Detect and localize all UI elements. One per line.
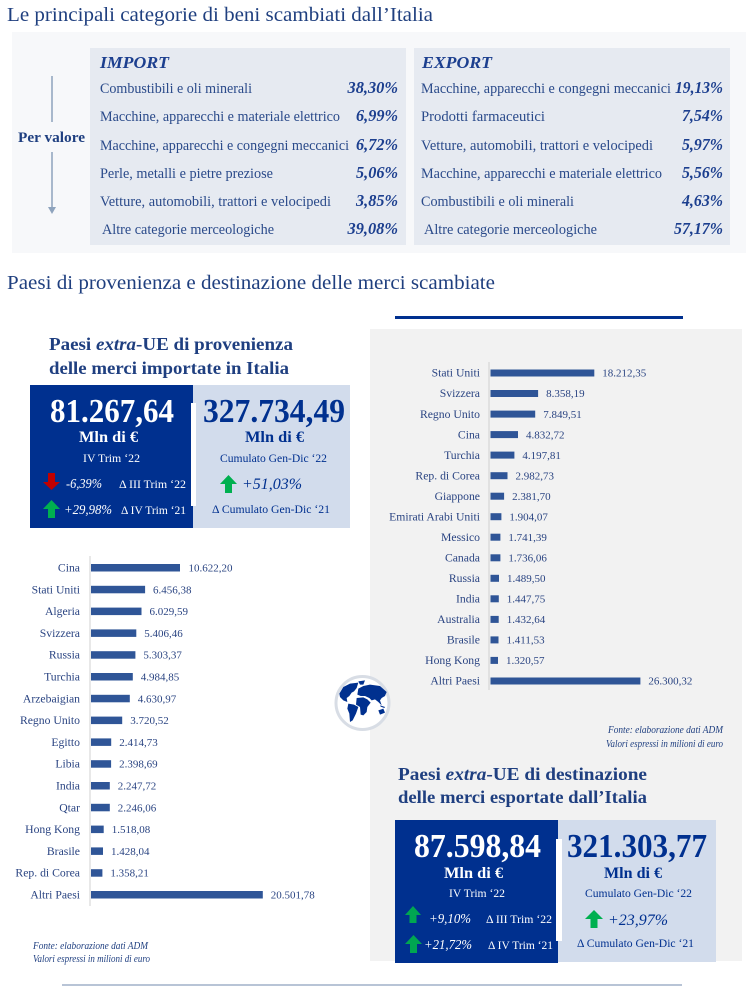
bar chart: import countries: Algeria xyxy=(45,605,81,618)
bar chart: export countries: Emirati Arabi Uniti xyxy=(389,510,481,523)
bar chart: import countries: 2.414,73 xyxy=(119,737,158,749)
panel: import: 3,85% xyxy=(355,191,398,210)
panel: export: Prodotti farmaceutici xyxy=(421,109,545,125)
panel: categorie xyxy=(12,32,746,253)
panel: export: 5,97% xyxy=(682,135,723,154)
kpi card: import: +51,03% xyxy=(242,476,302,493)
bar chart: export countries: 18.212,35 xyxy=(602,368,647,380)
bar chart: import countries: Regno Unito xyxy=(20,714,80,727)
kpi card: export: +9,10% xyxy=(429,911,471,926)
panel: export: 5,56% xyxy=(682,163,723,182)
kpi card: import: 81.267,64 xyxy=(50,393,174,430)
bar chart: import countries: Cina xyxy=(58,562,81,574)
per valore arrow: Per valore xyxy=(18,130,85,146)
bar chart: export countries: Australia xyxy=(437,613,481,626)
bar chart: import countries: Hong Kong xyxy=(25,823,80,836)
bar chart: export countries: Altri Paesi xyxy=(430,675,481,688)
source note: export: Valori espressi in milioni di euro xyxy=(606,739,723,750)
bar chart: export countries: India xyxy=(456,592,481,606)
per valore arrow xyxy=(18,76,85,214)
bar chart: import countries: 4.630,97 xyxy=(138,693,177,705)
bar chart: import countries: 3.720,52 xyxy=(130,715,169,727)
bar chart: export countries: Canada xyxy=(445,552,481,564)
bar chart: export countries: Rep. di Corea xyxy=(415,469,481,482)
bar chart: export countries: 1.904,07 xyxy=(509,511,548,523)
bar chart: import countries: 6.456,38 xyxy=(153,584,192,596)
kpi card: import xyxy=(30,385,350,528)
bar chart: import countries: 2.247,72 xyxy=(118,780,156,792)
panel: export: 7,54% xyxy=(682,106,723,125)
source note: import xyxy=(32,941,150,965)
bar chart: export countries: 1.736,06 xyxy=(508,552,547,564)
bar chart: import countries: Turchia xyxy=(44,670,81,684)
bar chart: import countries: Rep. di Corea xyxy=(15,867,81,880)
icon: green up arrow cumulative xyxy=(585,910,603,928)
source note: import: Valori espressi in milioni di euro xyxy=(33,954,150,965)
panel: import: Combustibili e oli minerali xyxy=(100,81,252,97)
bar chart: import countries: 1.518,08 xyxy=(112,824,151,836)
panel: import: 6,99% xyxy=(356,106,398,125)
panel: import: 39,08% xyxy=(347,219,398,238)
kpi card: import: Δ Cumulato Gen-Dic ‘21 xyxy=(212,504,330,516)
bar chart: import countries: 5.406,46 xyxy=(144,628,183,640)
bar chart: import countries: Libia xyxy=(55,758,81,771)
icon: green up arrow 2 xyxy=(405,935,422,953)
bar chart: import countries: Svizzera xyxy=(40,627,81,640)
panel: export: 57,17% xyxy=(674,219,723,238)
heading: import countries: delle merci importate in Italia xyxy=(49,358,289,378)
bar chart: import countries: Qtar xyxy=(59,801,80,814)
bar chart: export countries: 1.489,50 xyxy=(507,573,546,585)
panel: import: Perle, metalli e pietre preziose xyxy=(100,166,273,182)
panel: export xyxy=(414,48,730,245)
bar chart: export countries: Hong Kong xyxy=(425,654,480,667)
bar chart: import countries: Brasile xyxy=(47,845,80,858)
panel: import: Macchine, apparecchi e materiale elettrico xyxy=(100,109,340,125)
bar chart: import countries: 5.303,37 xyxy=(143,650,182,662)
panel: export: Altre categorie merceologiche xyxy=(424,222,597,238)
bar chart: import countries: 6.029,59 xyxy=(150,606,188,618)
bar chart: import countries: 20.501,78 xyxy=(271,890,315,902)
bar chart: export countries: 1.432,64 xyxy=(507,614,546,626)
title: paesi: Paesi di provenienza e destinazione delle merci scambiate xyxy=(7,272,495,294)
icon: green up arrow cumulative xyxy=(220,475,237,493)
heading: import countries: Paesi extra-UE di provenienza xyxy=(49,334,293,354)
bar chart: import countries: 4.984,85 xyxy=(141,672,180,684)
kpi card: export: Δ IV Trim ‘21 xyxy=(488,940,553,952)
bar chart: export countries: Brasile xyxy=(447,634,480,647)
panel: import: Vetture, automobili, trattori e velocipedi xyxy=(100,194,331,210)
bar chart: export countries: 1.320,57 xyxy=(506,655,545,667)
bar chart: export countries: 1.741,39 xyxy=(508,532,547,544)
kpi card: export: Δ Cumulato Gen-Dic ‘21 xyxy=(577,938,694,950)
panel: import: 6,72% xyxy=(356,135,398,154)
kpi card: import: -6,39% xyxy=(66,476,102,491)
kpi card: import: Cumulato Gen-Dic ‘22 xyxy=(220,453,327,465)
bar chart: import countries: 1.358,21 xyxy=(110,868,149,880)
icon: red down arrow xyxy=(43,473,60,490)
panel: import: 38,30% xyxy=(347,78,398,97)
bar chart: import countries: 1.428,04 xyxy=(111,846,150,858)
bar chart: export countries: 2.381,70 xyxy=(512,491,551,503)
bar chart: export countries: 1.447,75 xyxy=(507,594,546,606)
bar chart: export countries: Svizzera xyxy=(440,387,481,400)
kpi card: export: +23,97% xyxy=(608,912,668,929)
bar chart: import countries: Arzebaigian xyxy=(23,692,80,705)
bar chart: export countries: 1.411,53 xyxy=(506,635,545,647)
panel: export: Macchine, apparecchi e materiale elettrico xyxy=(421,166,662,182)
panel: export: Macchine, apparecchi e congegni meccanici xyxy=(421,81,671,97)
panel: export: 19,13% xyxy=(675,78,723,97)
bar chart: export countries: Russia xyxy=(449,572,481,585)
kpi card: import: Δ III Trim ‘22 xyxy=(119,479,186,491)
kpi card: export xyxy=(395,820,716,963)
kpi card: export: IV Trim ‘22 xyxy=(449,888,505,900)
kpi card: import: Δ IV Trim ‘21 xyxy=(121,505,186,517)
bar chart: export countries: 26.300,32 xyxy=(648,676,692,688)
panel: export countries background xyxy=(370,329,742,961)
bar chart: import countries xyxy=(15,556,315,906)
panel: import: Altre categorie merceologiche xyxy=(102,222,274,238)
panel: export: Vetture, automobili, trattori e velocipedi xyxy=(421,138,653,154)
bar chart: export countries: Giappone xyxy=(435,490,480,503)
heading: export countries xyxy=(398,764,647,807)
panel: export: Combustibili e oli minerali xyxy=(421,194,574,210)
kpi card: import: Mln di € xyxy=(245,429,304,446)
divider line top xyxy=(395,316,683,319)
heading: export countries: Paesi extra-UE di destinazione xyxy=(398,764,647,784)
panel: import: IMPORT xyxy=(99,53,170,72)
kpi card: import: IV Trim ‘22 xyxy=(83,453,140,465)
kpi card: export: Mln di € xyxy=(444,865,503,882)
source note: export: Fonte: elaborazione dati ADM xyxy=(607,725,724,736)
source note: import: Fonte: elaborazione dati ADM xyxy=(32,941,149,952)
kpi card: export: Cumulato Gen-Dic ‘22 xyxy=(585,888,692,900)
bar chart: import countries: Stati Uniti xyxy=(32,583,81,596)
bar chart: export countries: Turchia xyxy=(444,449,481,462)
source note: export xyxy=(606,725,724,750)
icon: globe xyxy=(336,676,389,730)
bar chart: export countries: 2.982,73 xyxy=(516,470,554,482)
bar chart: export countries: Regno Unito xyxy=(420,408,480,421)
bar chart: export countries: 4.832,72 xyxy=(526,429,564,441)
icon: green up arrow 1 xyxy=(405,906,421,923)
icon: green up arrow xyxy=(43,500,60,518)
kpi card: import: Mln di € xyxy=(79,429,138,446)
bar chart: export countries: Stati Uniti xyxy=(432,367,481,380)
panel: export: 4,63% xyxy=(681,191,723,210)
panel: import xyxy=(90,48,406,245)
kpi card: import: 327.734,49 xyxy=(203,393,345,430)
kpi card: export: Δ III Trim ‘22 xyxy=(486,914,552,926)
bar chart: import countries: 10.622,20 xyxy=(188,562,233,574)
panel: import: Macchine, apparecchi e congegni meccanici xyxy=(100,138,349,154)
bar chart: export countries: Cina xyxy=(458,428,481,441)
bar chart: export countries: 8.358,19 xyxy=(546,388,585,400)
bar chart: export countries: 4.197,81 xyxy=(522,450,561,462)
title: categorie: Le principali categorie di beni scambiati dall’Italia xyxy=(7,4,433,26)
bar chart: import countries: 2.246,06 xyxy=(118,802,157,814)
bar chart: export countries: Messico xyxy=(441,531,480,544)
kpi card: export: +21,72% xyxy=(424,937,472,952)
heading: export countries: delle merci esportate dall’Italia xyxy=(398,787,647,807)
kpi card: export: 87.598,84 xyxy=(414,828,541,865)
bar chart: import countries: India xyxy=(56,780,81,792)
bar chart: import countries: Altri Paesi xyxy=(30,888,81,902)
panel: import: 5,06% xyxy=(356,163,398,182)
bar chart: import countries: 2.398,69 xyxy=(119,759,158,771)
kpi card: export: 321.303,77 xyxy=(567,828,707,865)
bar chart: import countries: Russia xyxy=(49,649,81,662)
bar chart: export countries xyxy=(389,362,692,690)
bar chart: import countries: Egitto xyxy=(51,736,80,749)
kpi card: import: +29,98% xyxy=(64,502,112,517)
bar chart: export countries: 7.849,51 xyxy=(543,409,582,421)
kpi card: export: Mln di € xyxy=(604,865,662,882)
divider line bottom xyxy=(62,984,682,986)
heading: import countries xyxy=(49,334,293,378)
panel: export: EXPORT xyxy=(421,53,493,72)
